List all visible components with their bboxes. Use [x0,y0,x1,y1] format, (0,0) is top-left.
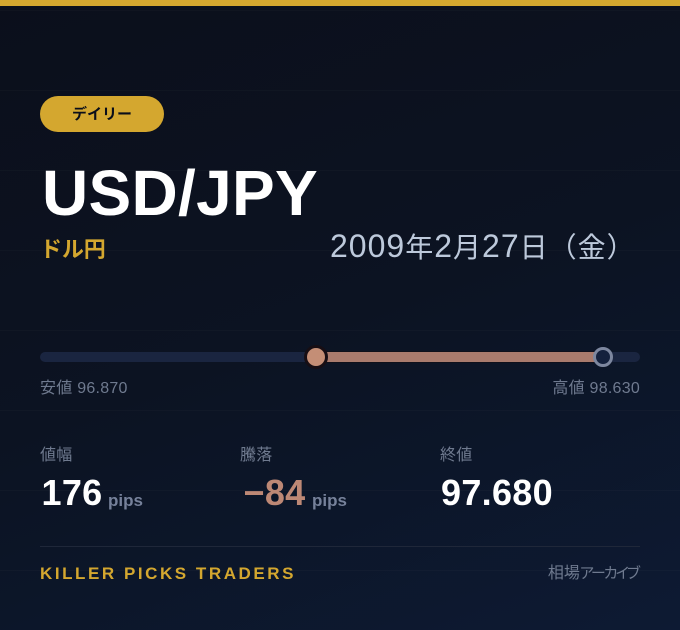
stat label: 騰落 [240,447,273,464]
range fill: close to high [316,352,602,362]
badge: daily [40,96,164,132]
stat unit: pips [108,491,143,510]
stat: close [440,446,553,513]
date: 2009年2月27日（金） [330,228,636,264]
brand name: KILLER PICKS TRADERS [40,564,296,583]
range track [40,352,640,362]
stat value: 97.680 [441,472,553,513]
top accent bar [0,0,680,6]
stat: range [40,446,143,513]
stat value: 176 [42,472,102,513]
stat label: 終値 [440,447,473,464]
subtitle: Japanese pair name: ドル円 [40,237,106,262]
title: currency pair: USD/JPY [42,157,318,229]
stat value: −84 [244,472,305,513]
footer divider [40,546,640,547]
marker: close [304,345,328,369]
stat label: 値幅 [40,447,73,464]
marker: high [593,347,613,367]
badge: daily: デイリー [72,106,132,123]
high label: 高値 98.630 [552,380,640,397]
low label: 安値 96.870 [40,380,128,397]
stat: change [240,446,347,513]
stat unit: pips [312,491,347,510]
archive label: 相場アーカイブ [548,565,640,582]
range bar chart [40,345,640,369]
